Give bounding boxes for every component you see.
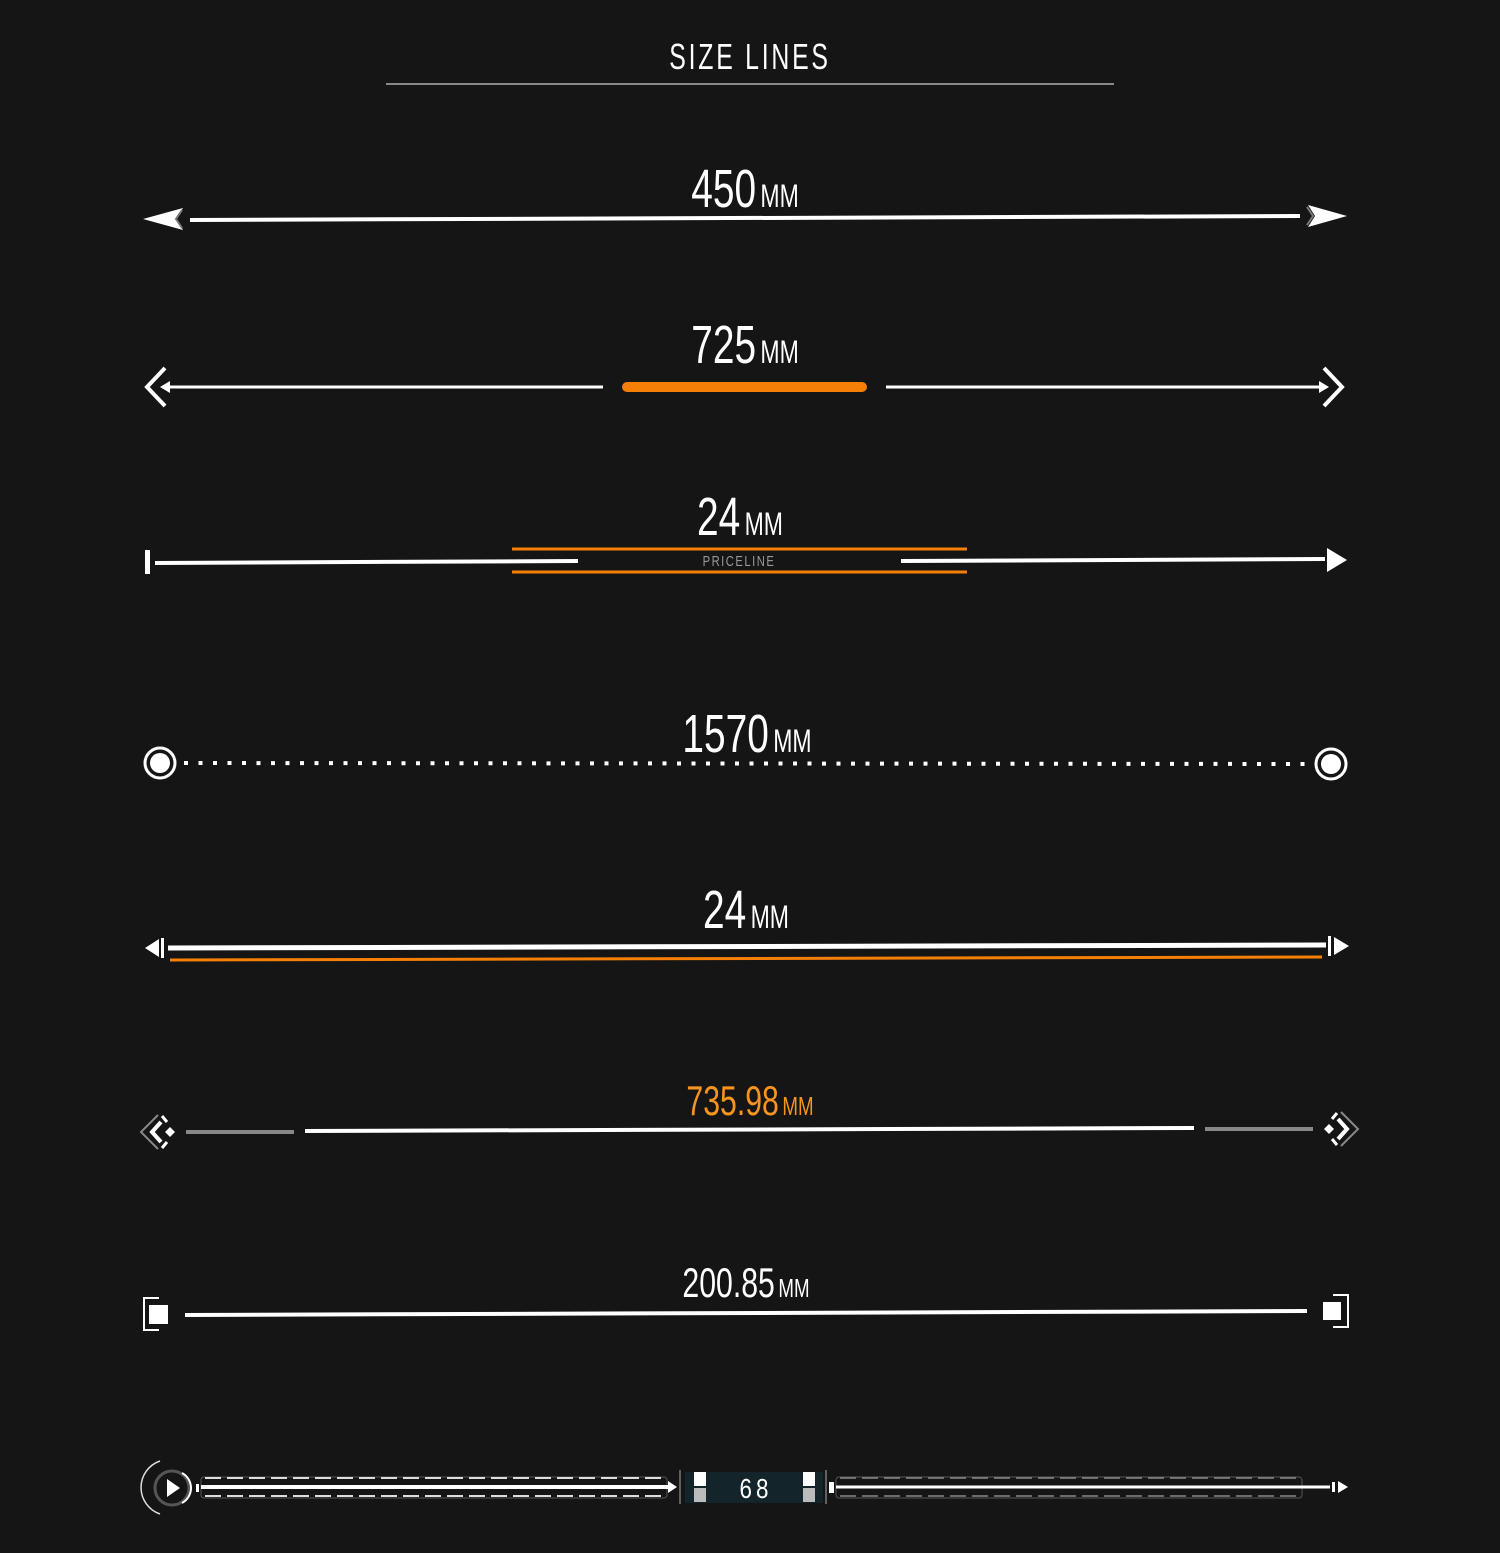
size line 8: 68 player xyxy=(141,1461,1348,1514)
icon: right chevrons xyxy=(1324,1112,1358,1146)
size line 7: 200.85 MM xyxy=(144,1259,1348,1330)
priceline label: PRICELINE xyxy=(703,552,775,569)
icon: left chevrons xyxy=(141,1115,175,1149)
size line 6: 735.98 MM orange: 735.98MM xyxy=(686,1077,814,1124)
icon: play button xyxy=(141,1461,191,1514)
title: SIZE LINES xyxy=(669,36,831,77)
value box 68: 68 xyxy=(740,1474,772,1505)
size line 3: 24 MM priceline: 24MM xyxy=(697,486,783,546)
size line 5: 24 MM double xyxy=(145,879,1349,960)
size line 5: 24 MM double: 24MM xyxy=(703,879,789,939)
size line 1: 450 MM: 450MM xyxy=(691,158,799,218)
size line 4: 1570 MM dotted: 1570MM xyxy=(682,703,812,763)
size line 6: 735.98 MM orange xyxy=(141,1077,1358,1149)
value box 68 xyxy=(685,1472,823,1505)
size line 1: 450 MM xyxy=(143,158,1347,230)
size line 2: 725 MM xyxy=(147,314,1342,406)
size line 3: 24 MM priceline xyxy=(145,486,1347,574)
size line 2: 725 MM: 725MM xyxy=(691,314,799,374)
size line 4: 1570 MM dotted xyxy=(145,703,1346,779)
size line 7: 200.85 MM: 200.85MM xyxy=(682,1259,810,1306)
